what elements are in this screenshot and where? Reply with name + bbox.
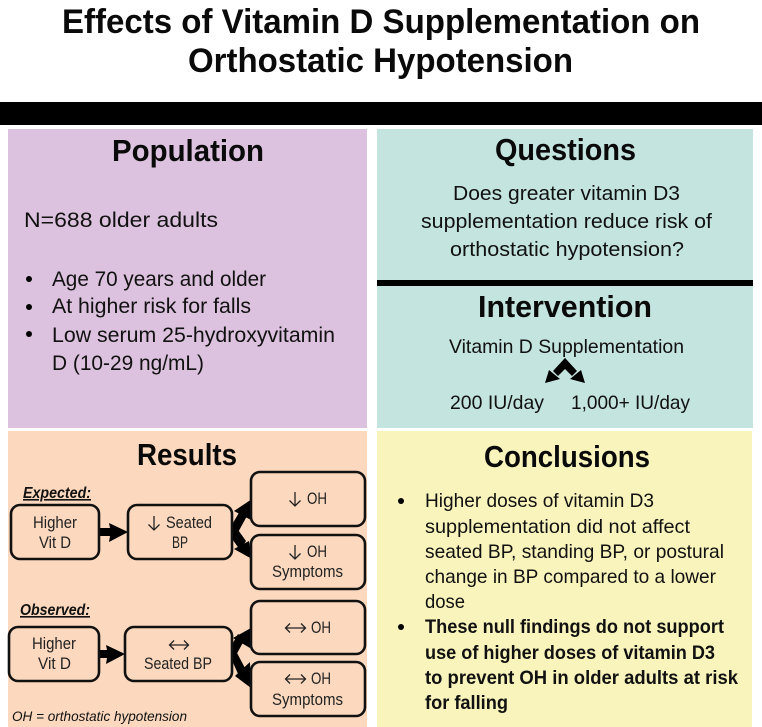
footnote: OH = orthostatic hypotension <box>12 708 187 724</box>
box: OH unchanged <box>251 601 365 654</box>
box: OH symptoms unchanged: OH <box>311 669 331 688</box>
conclusion: no effect: supplementation did not affect <box>425 516 691 538</box>
box: OH symptoms decreased: Symptoms <box>272 562 343 581</box>
population criteria list: Age 70 years and older <box>52 268 266 291</box>
box: higher vit D (expected): Higher <box>33 513 77 532</box>
heading: questions: Questions <box>495 132 636 167</box>
conclusion: null findings: These null findings do not support <box>425 616 724 638</box>
heading: intervention: Intervention <box>478 289 652 324</box>
box: seated BP decreased <box>128 505 232 559</box>
box: seated BP unchanged <box>125 627 232 681</box>
box: higher vit D (observed) <box>9 627 99 681</box>
conclusion: no effect: dose <box>425 591 465 613</box>
box: seated BP decreased: Seated <box>166 513 212 532</box>
box: higher vit D (expected) <box>11 505 99 559</box>
box: OH unchanged: OH <box>311 618 331 637</box>
title: Orthostatic Hypotension <box>188 42 573 80</box>
box: OH decreased: OH <box>307 489 327 508</box>
question text: supplementation reduce risk of <box>421 210 712 233</box>
question text: Does greater vitamin D3 <box>453 182 680 205</box>
box: higher vit D (observed): Higher <box>32 634 76 653</box>
heading: population: Population <box>112 133 264 168</box>
intervention label: Vitamin D Supplementation <box>449 336 684 358</box>
sample size: N=688 older adults <box>24 209 218 232</box>
heading: conclusions: Conclusions <box>484 439 650 474</box>
conclusion: null findings: to prevent OH in older adults at risk <box>425 667 738 689</box>
dose: high: 1,000+ IU/day <box>571 392 690 414</box>
title: Effects of Vitamin D Supplementation on <box>62 3 700 41</box>
divider between questions and intervention <box>377 280 753 286</box>
conclusion: null findings <box>398 616 738 714</box>
conclusion: null findings: use of higher doses of vitamin D3 <box>425 642 715 664</box>
icon: branching arrows <box>545 358 585 383</box>
box: seated BP unchanged: Seated BP <box>144 654 212 673</box>
panel: conclusions <box>377 431 752 727</box>
conclusion: no effect: Higher doses of vitamin D3 <box>425 490 654 512</box>
panel: population <box>8 129 367 428</box>
box: OH symptoms decreased: OH <box>307 542 327 561</box>
label: expected: Expected: <box>23 485 91 502</box>
title <box>62 3 700 80</box>
panel: questions <box>377 129 753 280</box>
population criteria list <box>26 268 335 375</box>
box: seated BP decreased: BP <box>172 533 188 552</box>
population criteria list: Low serum 25-hydroxyvitamin <box>52 324 335 347</box>
population criteria list: At higher risk for falls <box>52 295 251 318</box>
box: OH decreased <box>251 472 365 526</box>
population criteria list: D (10-29 ng/mL) <box>52 352 204 375</box>
dose: low: 200 IU/day <box>450 392 544 414</box>
conclusion: no effect: seated BP, standing BP, or postural <box>425 541 724 563</box>
black header bar <box>0 102 762 125</box>
heading: results: Results <box>137 437 237 472</box>
question text: orthostatic hypotension? <box>450 238 684 261</box>
arrows: observed pathway <box>99 628 251 688</box>
conclusion: no effect <box>398 490 724 613</box>
box: OH symptoms decreased <box>251 535 365 589</box>
conclusion: no effect: change in BP compared to a lower <box>425 566 716 588</box>
box: higher vit D (expected): Vit D <box>39 533 71 552</box>
conclusion: null findings: for falling <box>425 692 508 714</box>
box: OH symptoms unchanged: Symptoms <box>272 690 343 709</box>
box: OH symptoms unchanged <box>251 662 365 716</box>
arrows: expected pathway <box>99 499 252 559</box>
question text <box>421 182 712 261</box>
box: higher vit D (observed): Vit D <box>38 654 71 673</box>
panel: results <box>8 431 367 727</box>
panel: intervention <box>377 286 753 428</box>
label: observed: Observed: <box>20 602 90 619</box>
